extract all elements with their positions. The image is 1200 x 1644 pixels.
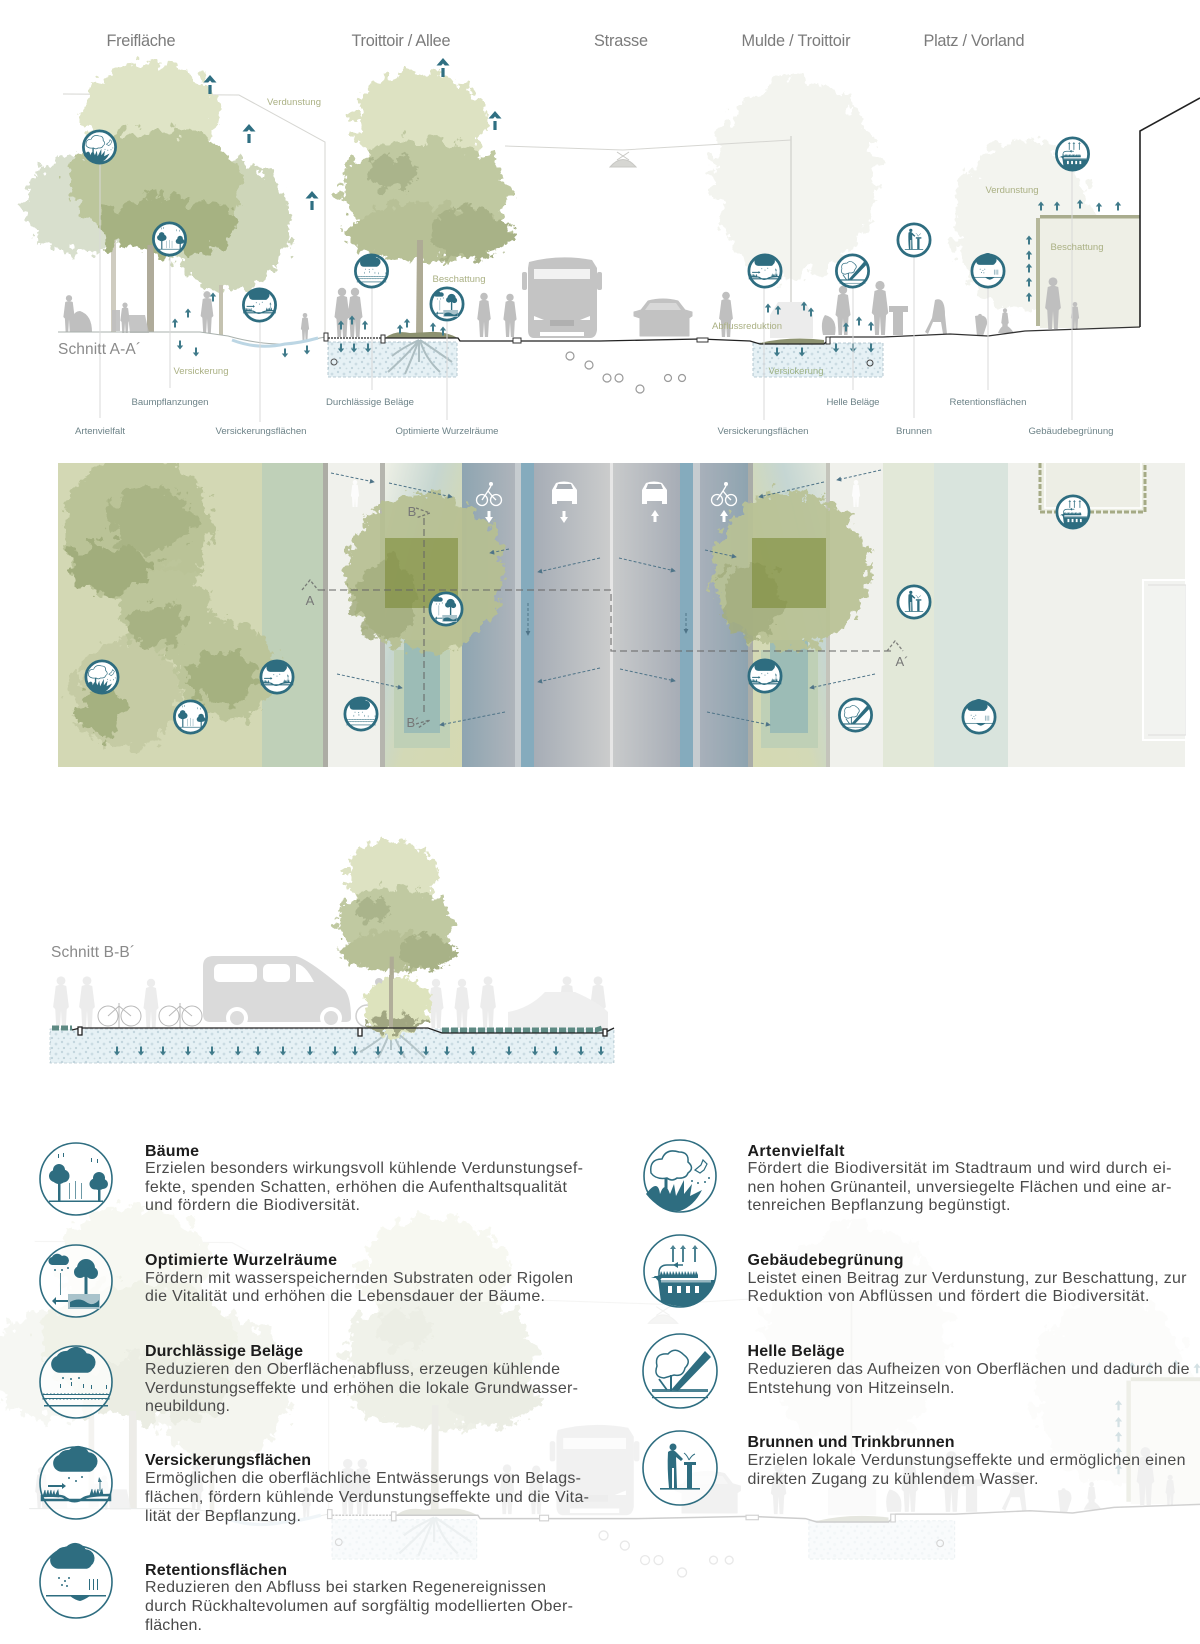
mode icons: pedestrians — [351, 480, 860, 507]
legend text: Brunnen und Trinkbrunnen: Brunnen und Trinkbrunnen — [748, 1434, 954, 1451]
cyclist — [356, 978, 386, 1027]
building footprints — [1040, 463, 1186, 740]
legend icon: Brunnen und Trinkbrunnen — [643, 1431, 717, 1505]
legend text: Optimierte Wurzelräume: Optimierte Wurzelräume — [145, 1252, 337, 1269]
cars — [634, 299, 813, 338]
runoff arrows — [331, 470, 881, 725]
shrub — [362, 976, 429, 1036]
legend text: Brunnen und Trinkbrunnen — [748, 1434, 1186, 1488]
section cut letters: B´ — [406, 715, 420, 730]
street lamp — [610, 152, 636, 167]
ground line — [58, 327, 1140, 346]
plan icons — [86, 496, 1089, 733]
legend text: Retentionsflächen — [145, 1562, 573, 1634]
legend text: Brunnen und Trinkbrunnen: direkten Zugang zu kühlendem Wasser. — [748, 1471, 1038, 1488]
legend text: Gebäudebegrünung: Leistet einen Beitrag zur Verdunstung, zur Beschattung, zur — [748, 1270, 1187, 1287]
mode icons: bicycles and cars — [476, 482, 736, 523]
legend text: Versickerungsflächen: Ermöglichen die oberflächliche Entwässerungs von Belags- — [145, 1470, 581, 1487]
legend text: Bäume — [145, 1143, 583, 1214]
roots — [360, 1029, 425, 1058]
green facade arrows — [1026, 200, 1121, 302]
building roof outline — [1140, 98, 1200, 327]
seepage arrows — [114, 1046, 604, 1056]
effect labels in olive: Verdunstung — [267, 97, 321, 108]
zone headings: Strasse — [594, 32, 648, 50]
trunk overlay — [389, 975, 393, 1028]
section label A-A: Schnitt A-A´ — [58, 341, 141, 358]
legend text: Artenvielfalt: Artenvielfalt — [748, 1143, 845, 1160]
legend text: Retentionsflächen: Retentionsflächen — [145, 1562, 287, 1579]
measure labels: Brunnen — [896, 426, 932, 437]
effect labels in olive: Beschattung — [1050, 242, 1104, 253]
zone headings: Troittoir / Allee — [352, 32, 450, 50]
zone headings: Mulde / Troittoir — [742, 32, 851, 50]
gravel beds with roots — [328, 340, 883, 377]
small water arrows — [172, 292, 874, 358]
van — [203, 956, 351, 1029]
measure labels: Helle Beläge — [826, 397, 880, 408]
legend text: Bäume: Erzielen besonders wirkungsvoll kühlende Verdunstungsef- — [145, 1160, 583, 1177]
legend icon: Helle Beläge — [643, 1334, 717, 1408]
legend text: Artenvielfalt: Fördert die Biodiversität im Stadtraum und wird durch ei- — [748, 1160, 1172, 1177]
gravel bed — [50, 1029, 614, 1063]
legend text: Durchlässige Beläge: Durchlässige Beläge — [145, 1343, 303, 1360]
legend icon: Artenvielfalt — [644, 1140, 716, 1212]
plan tree canopies: street — [346, 492, 868, 651]
legend text: Artenvielfalt: nen hohen Grünanteil, unversiegelte Flächen und eine ar- — [748, 1179, 1172, 1196]
legend text: Bäume: fekte, spenden Schatten, erhöhen die Aufenthaltsqualität — [145, 1179, 568, 1196]
evaporation arrows — [204, 58, 502, 210]
faded trees right — [713, 78, 1090, 311]
section icons — [83, 131, 1089, 321]
legend text: Durchlässige Beläge: neubildung. — [145, 1398, 230, 1415]
legend text: Optimierte Wurzelräume: die Vitalität und erhöhen die Lebensdauer der Bäume. — [145, 1288, 545, 1305]
section cut letters: B — [408, 504, 416, 519]
measure labels: Versickerungsflächen — [216, 426, 306, 437]
legend text: Optimierte Wurzelräume: Fördern mit wasserspeichernden Substraten oder Rigolen — [145, 1270, 573, 1287]
legend text: Helle Beläge: Reduzieren das Aufheizen von Oberflächen und dadurch die — [748, 1361, 1190, 1378]
legend: right column — [643, 1140, 1190, 1505]
legend: left column — [40, 1143, 589, 1634]
legend text: Versickerungsflächen: flächen, fördern kühlende Verdunstungseffekte und die Vita- — [145, 1489, 589, 1506]
legend text: Gebäudebegrünung: Reduktion von Abflüssen und fördert die Biodiversität. — [748, 1288, 1150, 1305]
legend icon: Gebäudebegrünung — [644, 1235, 716, 1307]
faded ghost of cross-section behind the legend — [0, 1207, 1200, 1577]
measure labels: Baumpflanzungen — [132, 397, 208, 408]
measure labels — [75, 397, 1114, 437]
legend icon: Versickerungsflächen — [40, 1446, 112, 1519]
effect labels in olive: Versickerung — [768, 366, 824, 377]
planting strip — [52, 1028, 602, 1030]
measure labels: Durchlässige Beläge — [326, 397, 414, 408]
legend text: Retentionsflächen: Reduzieren den Abfluss bei starken Regenereignissen — [145, 1579, 546, 1596]
measure labels: Artenvielfalt — [75, 426, 125, 437]
legend text: Bäume: und fördern die Biodiversität. — [145, 1197, 360, 1214]
legend icon: Durchlässige Beläge — [40, 1346, 112, 1418]
legend text: Versickerungsflächen: Versickerungsflächen — [145, 1452, 311, 1469]
measure labels: Optimierte Wurzelräume — [396, 426, 498, 437]
effect labels in olive: Beschattung — [432, 274, 486, 285]
bicycles — [98, 1003, 202, 1028]
tree B-B — [337, 841, 454, 1024]
panel: plan view — [58, 454, 1186, 767]
green facade block — [1036, 215, 1140, 328]
people — [63, 277, 1079, 340]
street lamp wire and pole — [63, 94, 791, 335]
legend text: Helle Beläge: Entstehung von Hitzeinseln. — [748, 1380, 954, 1397]
legend icon: Optimierte Wurzelräume — [40, 1245, 112, 1317]
plan tree canopies: Freifläche — [64, 454, 276, 748]
section cut lines — [302, 508, 903, 728]
section cut letters: A´ — [896, 654, 908, 669]
legend icon: Retentionsflächen — [40, 1543, 112, 1618]
effect labels in olive: Verdunstung — [986, 185, 1038, 196]
measure labels: Versickerungsflächen — [718, 426, 808, 437]
measure labels: Gebäudebegrünung — [1028, 426, 1114, 437]
legend text: Durchlässige Beläge — [145, 1343, 578, 1415]
bus — [522, 257, 602, 338]
legend text: Versickerungsflächen: lität der Bepflanzung. — [145, 1508, 301, 1525]
effect labels in olive: Abflussreduktion — [712, 321, 782, 332]
legend text: Optimierte Wurzelräume — [145, 1252, 573, 1305]
legend text: Helle Beläge — [748, 1343, 1190, 1397]
legend text: Gebäudebegrünung: Gebäudebegrünung — [748, 1252, 904, 1269]
legend icon: Bäume — [40, 1143, 112, 1215]
legend text: Durchlässige Beläge: Reduzieren den Oberflächenabfluss, erzeugen kühlende — [145, 1361, 560, 1378]
zone headings: Platz / Vorland — [924, 32, 1024, 50]
legend text: Artenvielfalt — [748, 1143, 1172, 1214]
tree cluster: Freifläche — [24, 63, 290, 335]
panel: street section A-A — [24, 63, 1140, 393]
plan bands — [58, 463, 1185, 767]
zone headings — [106, 32, 1024, 50]
legend text: Brunnen und Trinkbrunnen: Erzielen lokale Verdunstungseffekte und ermöglichen einen — [748, 1452, 1186, 1469]
faded pedestrians — [53, 976, 608, 1028]
legend text: Retentionsflächen: durch Rückhaltevolumen auf sorgfältig modellierten Ober- — [145, 1598, 573, 1615]
legend text: Helle Beläge: Helle Beläge — [748, 1343, 845, 1360]
drainage pipes — [566, 352, 686, 393]
legend text: Retentionsflächen: flächen. — [145, 1617, 202, 1634]
panel: section B-B — [50, 841, 614, 1063]
section cut letters — [306, 504, 908, 730]
legend text: Gebäudebegrünung — [748, 1252, 1187, 1305]
section cut letters: A — [306, 593, 315, 608]
planting at ground — [385, 332, 824, 344]
effect labels in olive — [174, 97, 1104, 377]
leader lines — [100, 164, 1072, 422]
tree: Troittoir / Allee — [341, 72, 510, 338]
ground line — [72, 1027, 614, 1036]
effect labels in olive: Versickerung — [174, 366, 228, 377]
zone headings: Freifläche — [106, 32, 176, 50]
legend text: Bäume: Bäume — [145, 1143, 199, 1160]
legend text: Durchlässige Beläge: Verdunstungseffekte und erhöhen die lokale Grundwasser- — [145, 1380, 578, 1397]
legend text: Artenvielfalt: tenreichen Bepflanzung begünstigt. — [748, 1197, 1010, 1214]
legend text: Versickerungsflächen — [145, 1452, 589, 1525]
measure labels: Retentionsflächen — [950, 397, 1026, 408]
section label B-B: Schnitt B-B´ — [51, 944, 135, 961]
